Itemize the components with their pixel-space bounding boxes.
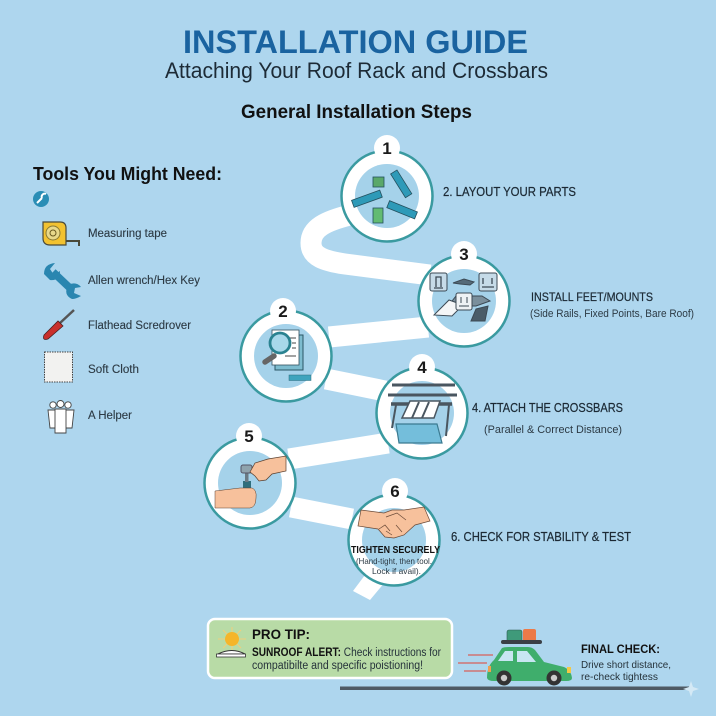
- step 4 circle: 4: [417, 358, 427, 377]
- step 5 circle: [204, 423, 296, 528]
- final check text: Drive short distance,: [581, 659, 671, 671]
- step 1 circle: 1: [382, 139, 392, 158]
- icon: wrench: [44, 263, 81, 299]
- step 6 label: 6. CHECK FOR STABILITY & TEST: [451, 530, 631, 544]
- step 6 circle: [348, 478, 440, 586]
- final check text: FINAL CHECK:: [581, 642, 660, 656]
- icon: measuring tape: [43, 222, 79, 246]
- step 1 label: 2. LAYOUT YOUR PARTS: [443, 185, 576, 199]
- step 3 label: (Side Rails, Fixed Points, Bare Roof): [530, 308, 694, 320]
- step 1 circle: [342, 135, 432, 242]
- inner caption: Lock if avail).: [372, 566, 421, 576]
- step 4 label: 4. ATTACH THE CROSSBARS: [472, 401, 623, 415]
- step 3 circle: [418, 241, 510, 346]
- step 5 circle: 5: [244, 427, 254, 446]
- winding white road: [289, 215, 430, 600]
- final check text: [581, 642, 671, 683]
- pro tip text: compatibilte and specific poistioning!: [252, 660, 423, 672]
- panel: tools list: [33, 164, 222, 433]
- step 4 label: (Parallel & Correct Distance): [484, 424, 622, 436]
- pro tip heading: PRO TIP:: [252, 626, 310, 642]
- icon: soft cloth: [44, 352, 72, 382]
- final check text: re-check tightess: [581, 671, 658, 683]
- label: soft cloth: Soft Cloth: [88, 364, 139, 376]
- inner caption: [351, 544, 440, 576]
- label: measuring tape: Measuring tape: [88, 228, 167, 240]
- sparkle: [683, 681, 699, 697]
- title: INSTALLATION GUIDE: [183, 24, 528, 60]
- road line: [340, 686, 692, 690]
- inner caption: (Hand-tight, then tool.: [356, 556, 432, 566]
- icon: screwdriver: [44, 310, 74, 340]
- section heading: General Installation Steps: [241, 102, 472, 123]
- icon: handshake: [358, 507, 430, 538]
- pro tip text: SUNROOF ALERT: Check instructions for: [252, 647, 441, 659]
- label: screwdriver: Flathead Scredrover: [88, 320, 191, 332]
- step 4 circle: [376, 354, 468, 458]
- icon: green car with luggage: [458, 629, 572, 686]
- icon: wrench badge: [33, 191, 49, 207]
- icon: sun and sunroof: [216, 627, 246, 657]
- panel: pro tip: [208, 619, 452, 678]
- inner caption: TIGHTEN SECURELY: [351, 544, 440, 556]
- step 3 label: INSTALL FEET/MOUNTS: [531, 290, 653, 304]
- step 2 circle: [240, 298, 332, 402]
- label: allen wrench: Allen wrench/Hex Key: [88, 275, 200, 287]
- label: helper: A Helper: [88, 410, 132, 422]
- step 4 label: [472, 401, 623, 436]
- pro tip text: [252, 647, 441, 672]
- subtitle: Attaching Your Roof Rack and Crossbars: [165, 58, 548, 83]
- step 6 circle: 6: [390, 482, 400, 501]
- icon: helpers: [48, 400, 74, 433]
- tools heading: Tools You Might Need:: [33, 164, 222, 184]
- step 3 circle: 3: [459, 245, 469, 264]
- step 2 circle: 2: [278, 302, 288, 321]
- step 3 label: [530, 290, 694, 320]
